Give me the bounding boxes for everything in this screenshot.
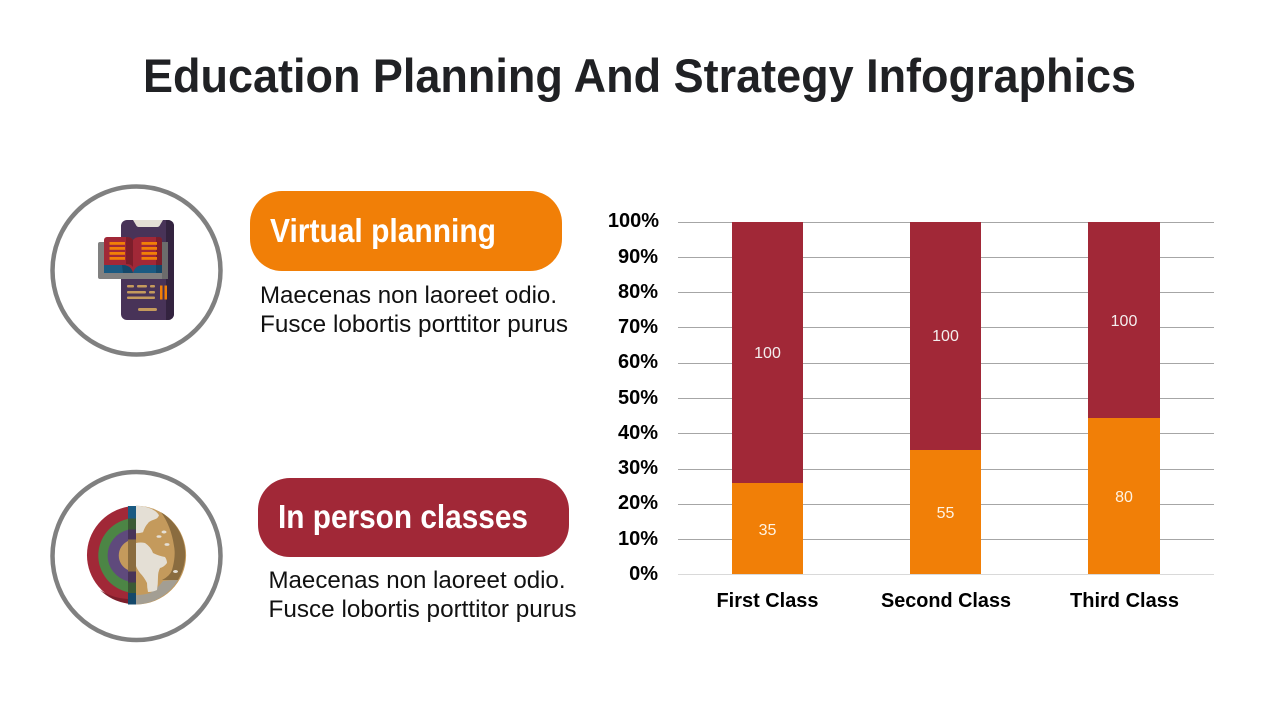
stacked bar chart [608,210,1214,612]
heading: virtual planning [250,191,562,271]
heading: in person classes [258,478,569,557]
y axis labels: 10% [618,528,658,550]
text: virtual planning description [260,282,568,338]
bar: first class [732,222,803,574]
x axis labels: Second Class [881,590,1011,612]
panel: in person classes [52,472,576,640]
bar: first class: 35 [759,522,776,539]
text: virtual planning description: Fusce lobortis porttitor purus [260,311,568,338]
y axis labels: 60% [618,351,658,373]
y axis labels: 40% [618,422,658,444]
y axis labels: 100% [608,210,659,232]
panel: virtual planning [52,186,568,354]
heading: in person classes: In person classes [278,498,528,535]
x axis labels [716,590,1179,612]
text: in person classes description: Maecenas non laoreet odio. [268,567,566,594]
y axis labels: 70% [618,316,658,338]
bar: first class: 100 [754,345,781,362]
y axis labels: 80% [618,281,658,303]
x axis labels: First Class [716,590,818,612]
bar: second class: 100 [932,328,959,345]
y axis labels: 0% [629,563,658,585]
text: virtual planning description: Maecenas non laoreet odio. [260,282,557,309]
bar: second class [910,222,981,574]
icon: globe layers [52,472,220,640]
text: in person classes description: Fusce lobortis porttitor purus [268,596,576,623]
text: in person classes description [268,567,576,623]
bar: third class: 80 [1115,489,1133,506]
y axis labels: 30% [618,457,658,479]
y axis labels: 20% [618,492,658,514]
bar: third class [1088,222,1160,574]
y axis labels: 50% [618,387,658,409]
heading: virtual planning: Virtual planning [270,212,496,249]
y axis labels: 90% [618,246,658,268]
title: Education Planning And Strategy Infographics [143,49,1136,102]
bar: second class: 55 [937,505,954,522]
bar: third class: 100 [1111,313,1137,330]
y axis labels [608,210,659,585]
icon: phone with book [52,186,220,354]
x axis labels: Third Class [1070,590,1179,612]
